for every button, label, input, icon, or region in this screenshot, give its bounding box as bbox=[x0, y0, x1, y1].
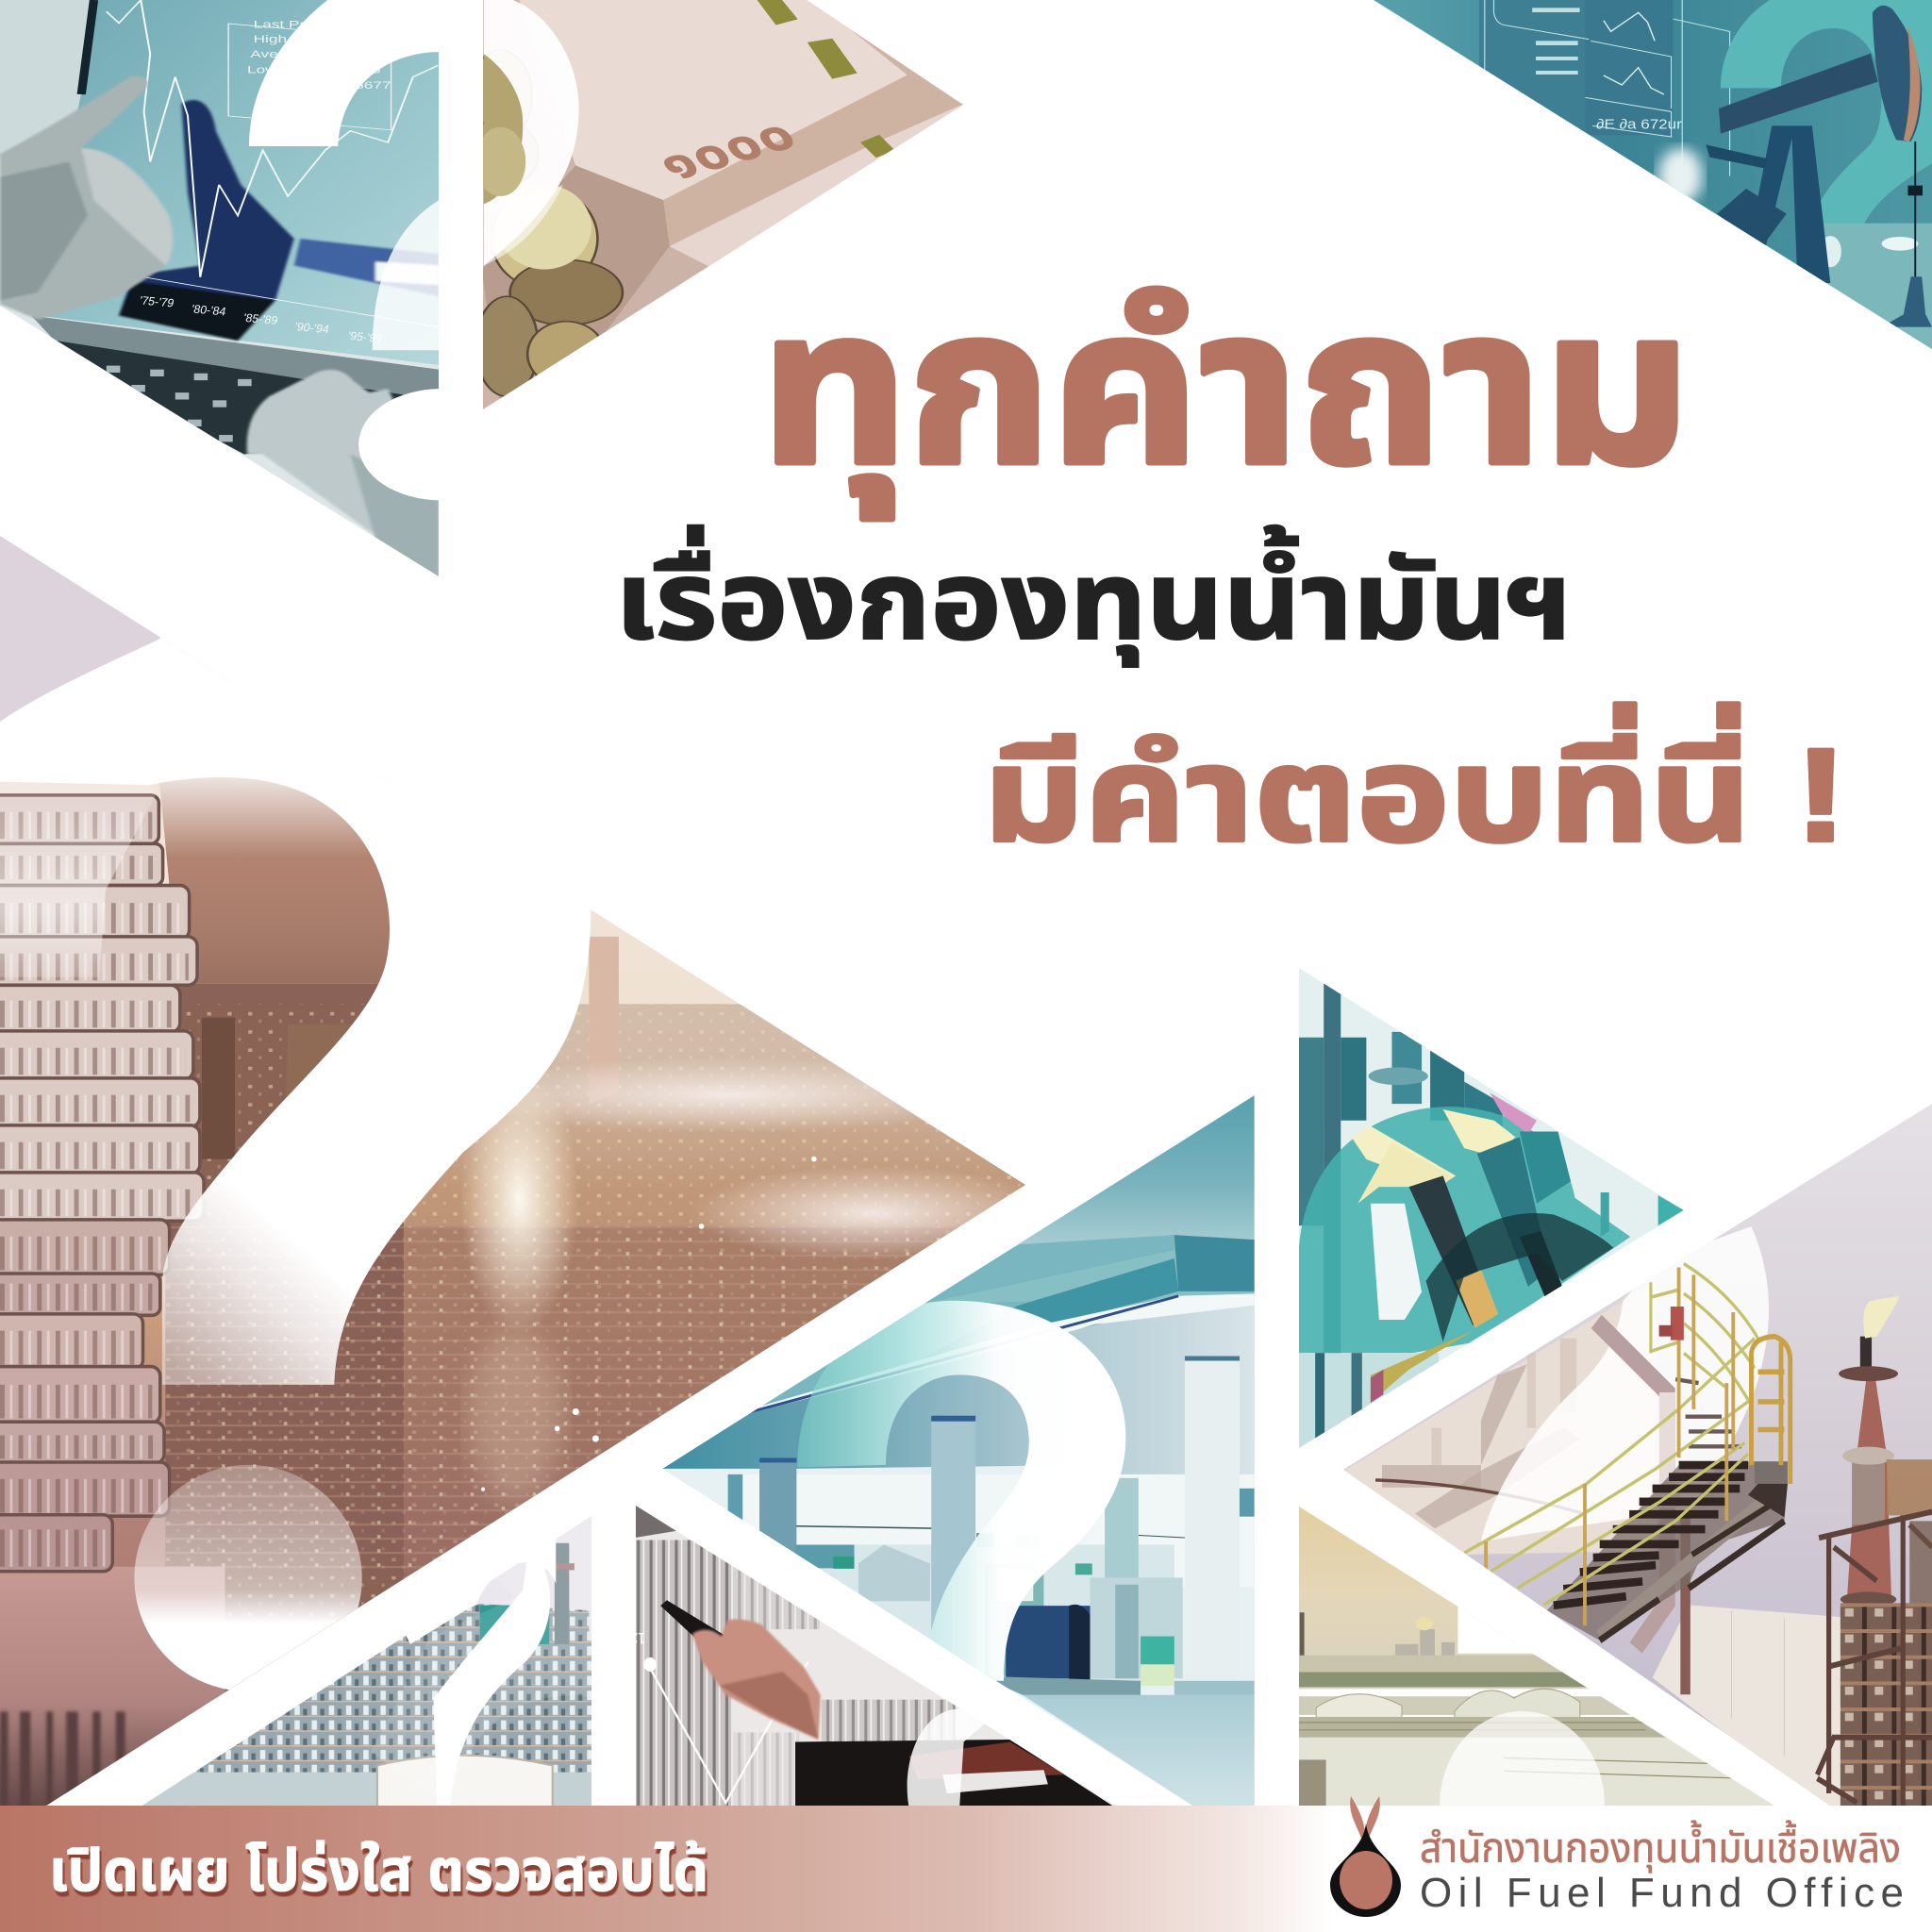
panel: laptop stock chart photo: 556 bbox=[354, 65, 381, 75]
white question mark bbox=[797, 1301, 1125, 1681]
storage tank bbox=[1316, 1282, 1656, 1555]
panel: fuel pump nozzles photo bbox=[1290, 960, 1694, 1463]
phone bbox=[660, 1600, 724, 1638]
store bbox=[795, 1545, 855, 1568]
footer slogan: เปิดเผย โปร่งใส ตรวจสอบได้ bbox=[49, 1839, 708, 1904]
panel: refinery stairs and flare stack photo bbox=[1316, 1077, 1932, 1824]
icon: oil fuel fund drop logo bbox=[1330, 1796, 1401, 1917]
panel: laptop stock chart photo: High bbox=[254, 34, 287, 45]
panel: hand holding phone over city photo bbox=[606, 1498, 1128, 1817]
panel: laptop stock chart photo bbox=[0, 0, 439, 576]
panel: refinery photo with question mark bbox=[142, 1516, 591, 1806]
distant city bbox=[1395, 1629, 1455, 1669]
nozzles bbox=[1352, 1126, 1456, 1187]
hand bbox=[692, 1619, 821, 1740]
pump jack bbox=[1719, 54, 1878, 134]
panel: lavender sky fragment of coin panel and coins over city photo bbox=[0, 528, 1058, 1820]
panel: baht banknotes and coins photo bbox=[483, 0, 963, 409]
right hand bbox=[247, 370, 440, 581]
white question mark: hook, stem and dot bbox=[249, 0, 439, 500]
spherical tanks bbox=[1455, 1689, 1580, 1719]
laptop screen bezel bbox=[81, 0, 93, 94]
panel: laptop stock chart photo: Low bbox=[247, 65, 277, 75]
title: headline line 2: เรื่องกองทุนน้ำมันฯ bbox=[615, 525, 1572, 667]
footer band bbox=[0, 1796, 1932, 1932]
white question mark bbox=[1481, 1226, 1769, 1541]
panel: laptop stock chart photo: '90-'94 bbox=[293, 321, 330, 336]
panel: oil pump jack photo: ∂E ∂a 672ur bbox=[1596, 118, 1683, 132]
pipe bbox=[1596, 1322, 1667, 1648]
logo text: English organisation name: Oil Fuel Fund Office bbox=[1420, 1870, 1904, 1916]
question mark dot bbox=[1440, 1711, 1605, 1898]
white question mark bbox=[0, 638, 591, 1385]
panel: hand holding phone over city photo: 12697 bbox=[606, 1629, 646, 1647]
left hand bbox=[0, 75, 173, 320]
question mark overlay bbox=[484, 0, 579, 266]
panel: oil pump jack photo bbox=[1358, 0, 1932, 358]
coin stack bbox=[0, 795, 204, 1572]
question mark bbox=[371, 1543, 591, 1764]
scaffold bbox=[1887, 1459, 1932, 1515]
translucent question mark arch bbox=[1298, 1107, 1630, 1353]
panel: oil storage tanks photo bbox=[1283, 1503, 1843, 1898]
panel: laptop stock chart photo: ,6677 bbox=[350, 80, 391, 92]
panel: laptop stock chart photo: Last Pri bbox=[254, 19, 308, 30]
floor bbox=[1023, 1695, 1255, 1807]
dark foreground bbox=[795, 1740, 1115, 1807]
panel: laptop stock chart photo: '80-'84 bbox=[191, 303, 227, 318]
dot of question mark bbox=[908, 1709, 984, 1806]
translucent hook end of question mark bbox=[0, 782, 156, 977]
panel: baht banknotes and coins photo: ๑๐๐๐ bbox=[643, 104, 808, 192]
panel: gas station photo bbox=[662, 1095, 1255, 1806]
title: headline line 3: มีคำตอบที่นี่ ! bbox=[983, 702, 1847, 869]
title: headline line 1: ทุกคำถาม bbox=[760, 266, 1690, 519]
panel: laptop stock chart photo: Avera bbox=[250, 49, 292, 60]
panel: laptop stock chart photo: '75-'79 bbox=[139, 294, 175, 309]
dark blue reflection bbox=[119, 100, 440, 341]
coins bbox=[483, 57, 625, 397]
stairs bbox=[1547, 1461, 1788, 1641]
wall bbox=[1653, 1605, 1854, 1808]
panel: laptop stock chart photo: '95-'99 bbox=[346, 330, 384, 345]
logo text: Thai organisation name: สำนักงานกองทุนน้ำมันเชื้อเพลิง bbox=[1420, 1820, 1901, 1874]
panel: laptop stock chart photo: '85-'89 bbox=[242, 311, 279, 327]
question mark notch bbox=[1457, 1562, 1539, 1654]
flare stack bbox=[1847, 1375, 1891, 1599]
pillars bbox=[759, 1462, 796, 1555]
teal question mark bbox=[1721, 0, 1932, 224]
yellow handrails bbox=[1464, 1264, 1757, 1605]
